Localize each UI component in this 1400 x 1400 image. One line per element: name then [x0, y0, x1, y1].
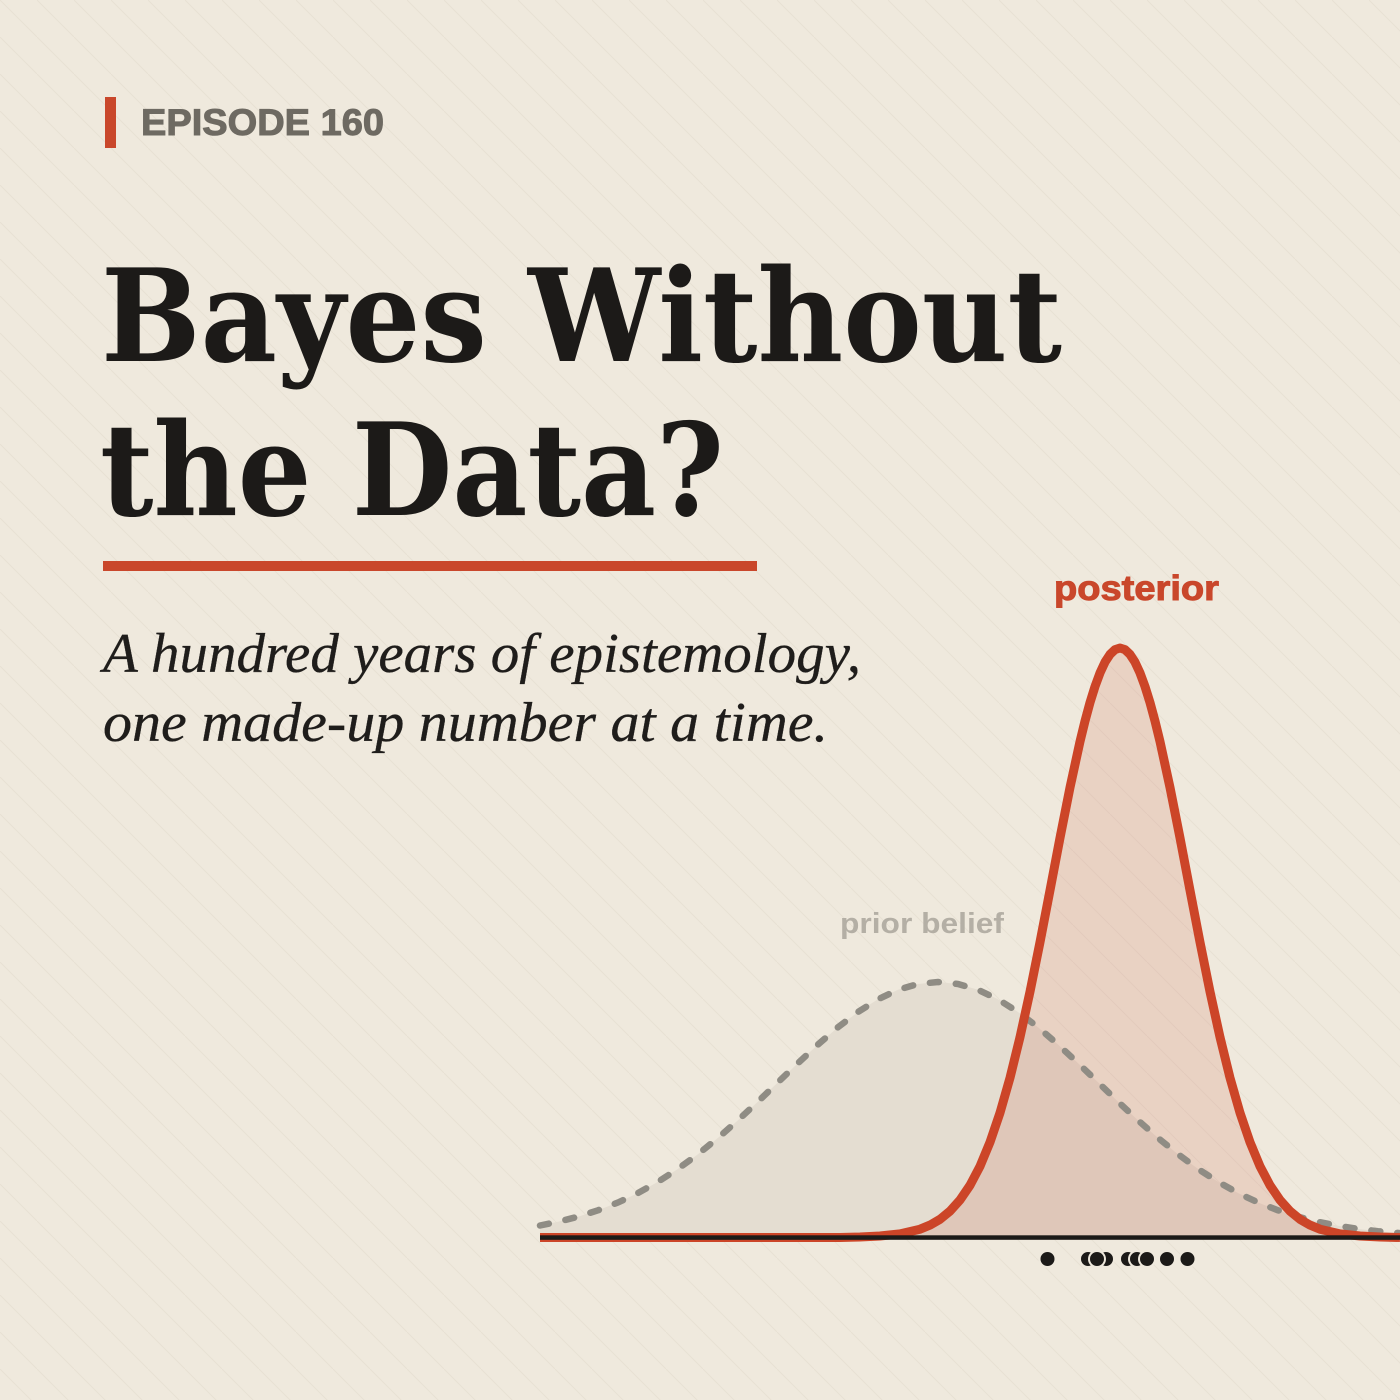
subtitle: one made-up number at a time. [103, 692, 828, 754]
episode tag [105, 97, 384, 148]
data points [1040, 1251, 1196, 1267]
prior fill [540, 982, 1400, 1237]
episode label: EPISODE 160 [141, 102, 384, 143]
subtitle [99, 623, 861, 754]
prior curve (dashed) [540, 982, 1400, 1233]
posterior fill [840, 648, 1400, 1237]
title [100, 242, 1062, 546]
baseline axis [540, 1235, 1400, 1240]
accent bar [105, 97, 116, 148]
title: the Data? [100, 396, 724, 546]
label: posterior: posterior [1054, 569, 1219, 608]
title underline [103, 561, 757, 571]
label: prior belief: prior belief [840, 908, 1004, 940]
chart: prior and posterior distributions [540, 648, 1400, 1240]
posterior curve [540, 648, 1400, 1238]
title: Bayes Without [101, 242, 1062, 392]
subtitle: A hundred years of epistemology, [99, 623, 861, 685]
